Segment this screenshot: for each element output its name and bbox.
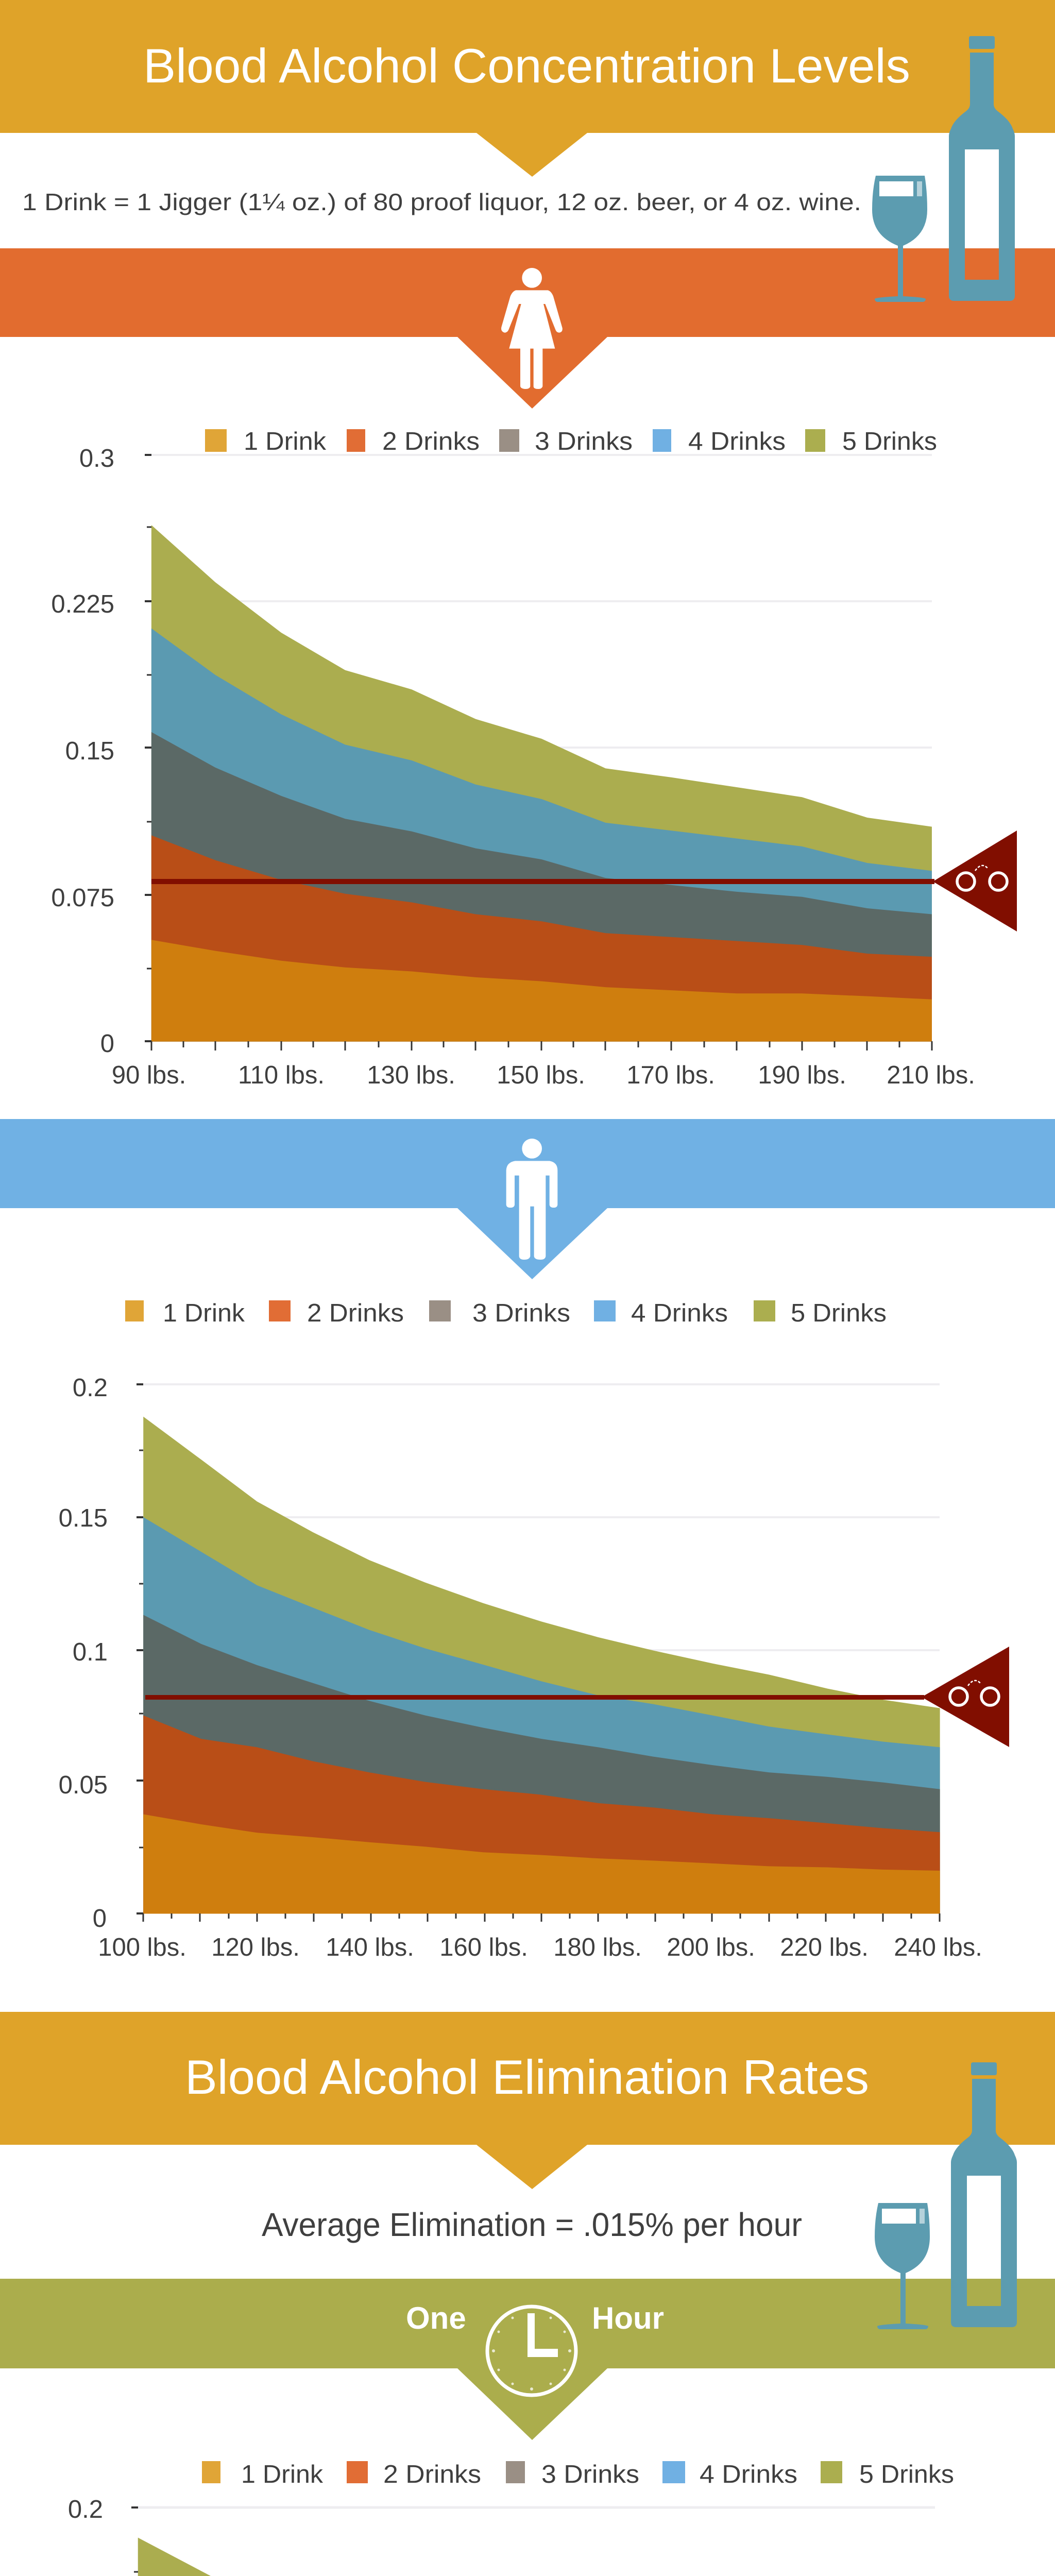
stacked area chart <box>151 525 932 1042</box>
legend: 4 Drinks <box>700 2461 797 2488</box>
y axis labels: 0.225 <box>51 590 114 618</box>
section: men header banner <box>0 1119 1055 1279</box>
panel: one hour BAC chart <box>54 2461 1004 2576</box>
legend: 3 Drinks <box>472 1299 570 1327</box>
y axis labels: 0 <box>93 1905 107 1933</box>
gold title banner <box>0 2012 1055 2189</box>
legend: 2 Drinks <box>307 1299 404 1327</box>
one label: One <box>406 2301 466 2335</box>
legend: 4 Drinks <box>688 428 786 455</box>
legend <box>125 1299 887 1327</box>
icon: wine bottle <box>951 2062 1017 2327</box>
x axis labels: 160 lbs. <box>439 1934 528 1961</box>
x axis labels: 150 lbs. <box>497 1061 585 1089</box>
x axis labels: 170 lbs. <box>626 1061 715 1089</box>
stacked area chart <box>143 1417 940 1914</box>
legend <box>205 428 937 455</box>
legend: 3 Drinks <box>535 428 633 455</box>
olive one hour banner <box>0 2279 1055 2440</box>
legend: 3 Drinks <box>541 2461 639 2488</box>
x axis labels: 90 lbs. <box>112 1061 186 1089</box>
y axis labels: 0.3 <box>79 445 114 472</box>
icon: clock <box>487 2307 576 2395</box>
icon: wine bottle <box>949 36 1015 301</box>
section: blood alcohol elimination rates header <box>0 2012 1055 2440</box>
x axis labels <box>98 1934 982 1961</box>
legend: 1 Drink <box>244 428 327 455</box>
section: blood alcohol concentration levels header <box>0 0 1055 409</box>
y axis labels <box>59 1374 108 1933</box>
y axis labels: 0.05 <box>59 1771 108 1799</box>
x axis labels <box>112 1061 975 1089</box>
icon: wine glass <box>872 176 927 302</box>
icon: handcuffs marker <box>922 1647 1009 1747</box>
y axis labels: 0.15 <box>65 737 114 765</box>
icon: handcuffs marker <box>933 831 1017 931</box>
y axis labels: 0.075 <box>51 884 114 912</box>
x axis labels: 220 lbs. <box>780 1934 869 1961</box>
legend <box>202 2461 954 2488</box>
x axis labels: 140 lbs. <box>326 1934 414 1961</box>
y axis labels: 0.2 <box>68 2496 103 2523</box>
x axis labels: 180 lbs. <box>553 1934 642 1961</box>
legend: 5 Drinks <box>859 2461 954 2488</box>
legend: 2 Drinks <box>383 2461 481 2488</box>
x axis labels: 240 lbs. <box>894 1934 982 1961</box>
x axis labels: 210 lbs. <box>887 1061 975 1089</box>
x axis labels: 200 lbs. <box>667 1934 755 1961</box>
legend: 1 Drink <box>241 2461 323 2488</box>
legal limit line <box>145 1695 924 1700</box>
icon: wine glass <box>875 2203 930 2329</box>
orange women banner <box>0 248 1055 409</box>
legend: 5 Drinks <box>842 428 937 455</box>
x axis labels: 190 lbs. <box>758 1061 846 1089</box>
title: Blood Alcohol Concentration Levels <box>143 39 910 93</box>
legend: 2 Drinks <box>382 428 480 455</box>
y axis labels: 0.2 <box>73 1374 108 1402</box>
stacked area chart <box>138 2538 935 2576</box>
blue men banner <box>0 1119 1055 1279</box>
icon: man <box>506 1139 557 1260</box>
icon: woman <box>501 268 563 389</box>
legend: 4 Drinks <box>631 1299 728 1327</box>
y axis labels <box>51 445 114 1058</box>
legal limit line <box>151 879 934 884</box>
x axis labels: 100 lbs. <box>98 1934 186 1961</box>
hour label: Hour <box>592 2301 664 2335</box>
legend: 1 Drink <box>163 1299 245 1327</box>
x axis labels: 110 lbs. <box>238 1061 325 1089</box>
legend: 5 Drinks <box>791 1299 887 1327</box>
average elimination text: Average Elimination = .015% per hour <box>262 2206 802 2243</box>
drink definition text: 1 Drink = 1 Jigger (1¼ oz.) of 80 proof liquor, 12 oz. beer, or 4 oz. wine. <box>22 189 861 215</box>
x axis labels: 120 lbs. <box>211 1934 300 1961</box>
panel: women BAC chart <box>51 428 1017 1089</box>
gold title banner <box>0 0 1055 177</box>
title: Blood Alcohol Elimination Rates <box>185 2050 869 2104</box>
y axis labels: 0 <box>100 1030 114 1058</box>
x axis labels: 130 lbs. <box>367 1061 455 1089</box>
panel: men BAC chart <box>59 1299 1009 1961</box>
y axis labels: 0.15 <box>59 1504 108 1532</box>
y axis labels: 0.1 <box>73 1638 108 1666</box>
